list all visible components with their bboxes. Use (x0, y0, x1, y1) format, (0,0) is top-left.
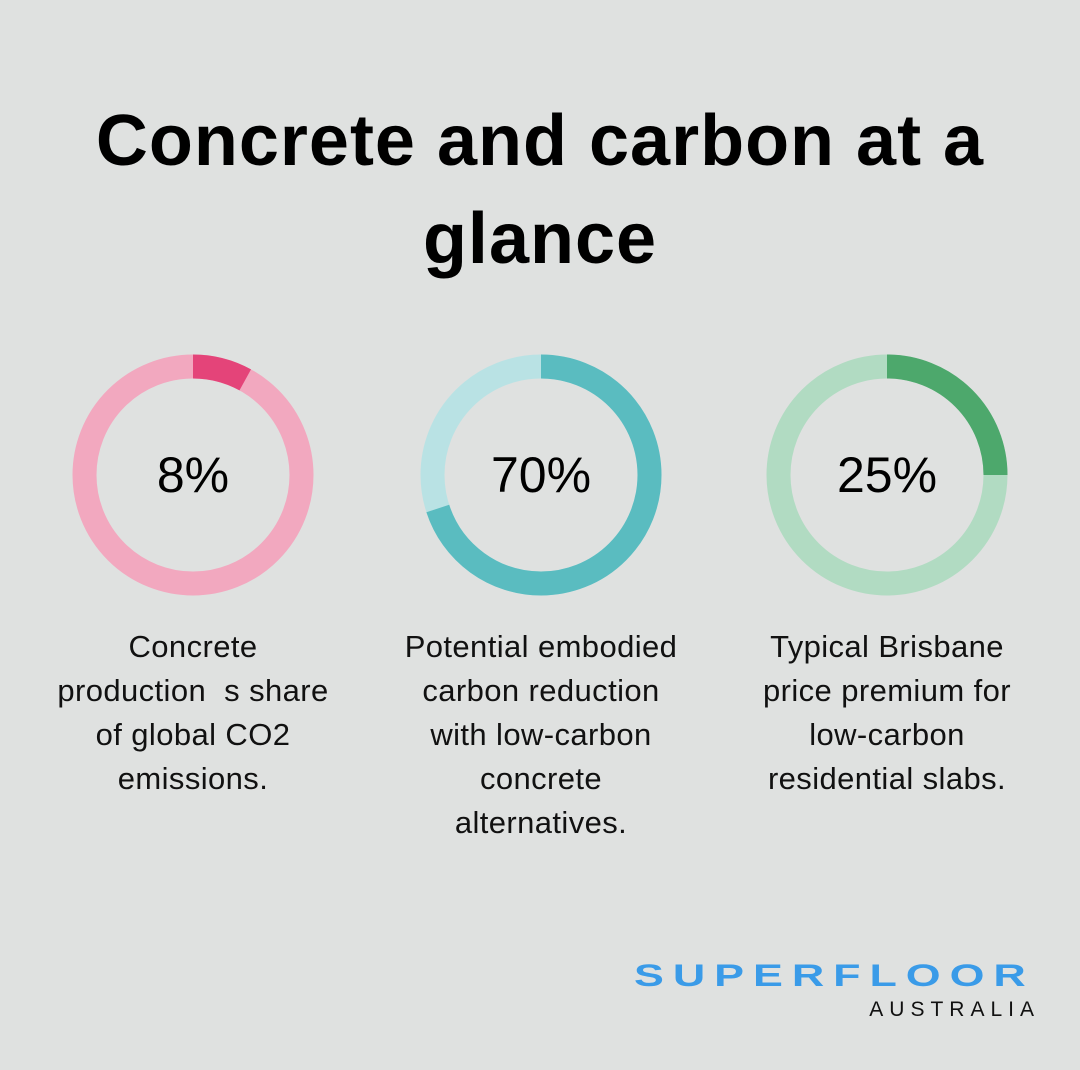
text: 70% description: alternatives. (455, 805, 627, 840)
donut: 8%: 8% (157, 447, 229, 503)
logo: SUPERFLOOR (634, 959, 1035, 993)
text: 70% description: Potential embodied (405, 629, 677, 664)
donut: 25% (766, 354, 1008, 596)
text: 70% description: with low-carbon (430, 717, 652, 752)
logo (634, 959, 1040, 1021)
text: 8% description: Concrete (128, 629, 258, 664)
text: 25% description: price premium for (763, 673, 1011, 708)
donut: 70% (420, 354, 662, 596)
donut: 25%: 25% (837, 447, 937, 503)
title (96, 101, 984, 279)
text: 70% description: carbon reduction (422, 673, 660, 708)
text: 8% description: of global CO2 (96, 717, 290, 752)
text: 25% description: Typical Brisbane (770, 629, 1004, 664)
text: 25% description: residential slabs. (768, 761, 1006, 796)
text: 25% description (763, 629, 1011, 796)
text: 25% description: low-carbon (809, 717, 965, 752)
text: 70% description: concrete (480, 761, 602, 796)
logo: AUSTRALIA (869, 998, 1040, 1021)
text: 8% description (57, 629, 329, 796)
donut: 8% (72, 354, 314, 596)
text: 70% description (405, 629, 677, 840)
text: 8% description: production s share (57, 673, 329, 708)
donut: 70%: 70% (491, 447, 591, 503)
title: Concrete and carbon at a (96, 101, 984, 181)
title: glance (423, 199, 657, 279)
text: 8% description: emissions. (118, 761, 268, 796)
